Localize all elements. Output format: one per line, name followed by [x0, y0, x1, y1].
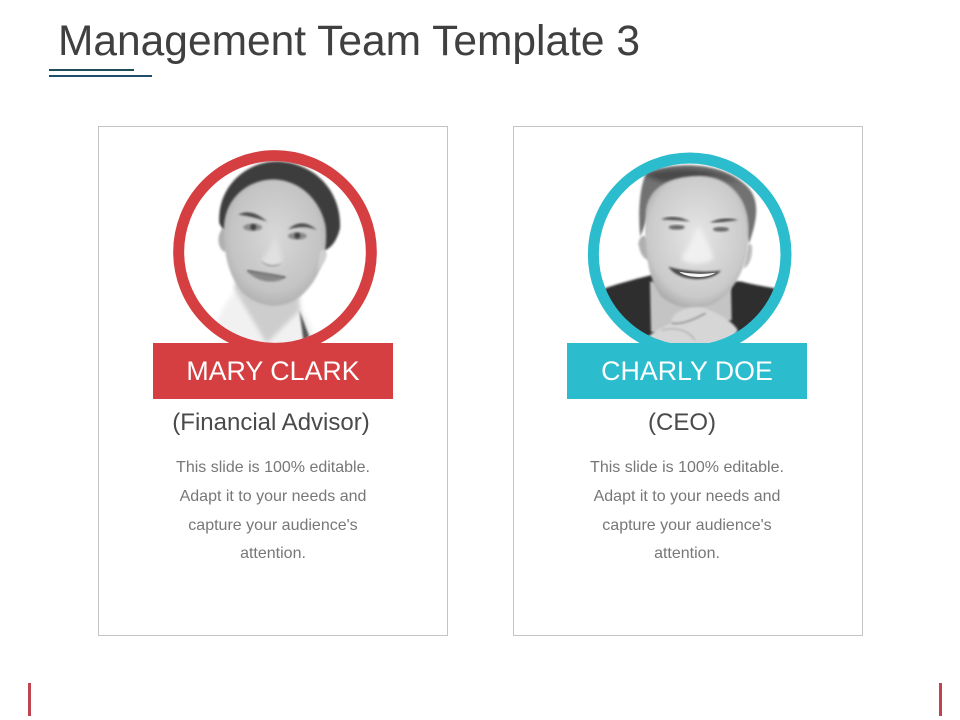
- description: Mary Clark: [176, 459, 370, 562]
- role: CEO: (CEO): [648, 409, 716, 436]
- description: Charly Doe: Adapt it to your needs and: [594, 488, 780, 505]
- name banner: Charly Doe: [567, 343, 807, 399]
- panel: Charly Doe card: [513, 126, 863, 636]
- description: Mary Clark: Adapt it to your needs and: [180, 488, 366, 505]
- description: Charly Doe: capture your audience's: [602, 517, 772, 534]
- title: Management Team Template 3: [58, 18, 640, 65]
- description: Charly Doe: [590, 459, 784, 562]
- description: Mary Clark: This slide is 100% editable.: [176, 459, 370, 476]
- description: Charly Doe: attention.: [654, 545, 720, 562]
- panel: Mary Clark card: [98, 126, 448, 636]
- description: Charly Doe: This slide is 100% editable.: [590, 459, 784, 476]
- title underline: [49, 69, 152, 77]
- description: Mary Clark: capture your audience's: [188, 517, 358, 534]
- name banner: Mary Clark: [153, 343, 393, 399]
- name banner: Charly Doe: CHARLY DOE: [601, 356, 773, 386]
- name banner: Mary Clark: MARY CLARK: [186, 356, 360, 386]
- description: Mary Clark: attention.: [240, 545, 306, 562]
- portrait: Mary Clark: [173, 150, 377, 343]
- footer mark left: [28, 683, 31, 716]
- portrait: Charly Doe: [588, 152, 792, 343]
- role: Financial Advisor: (Financial Advisor): [172, 409, 370, 436]
- footer mark right: [939, 683, 942, 716]
